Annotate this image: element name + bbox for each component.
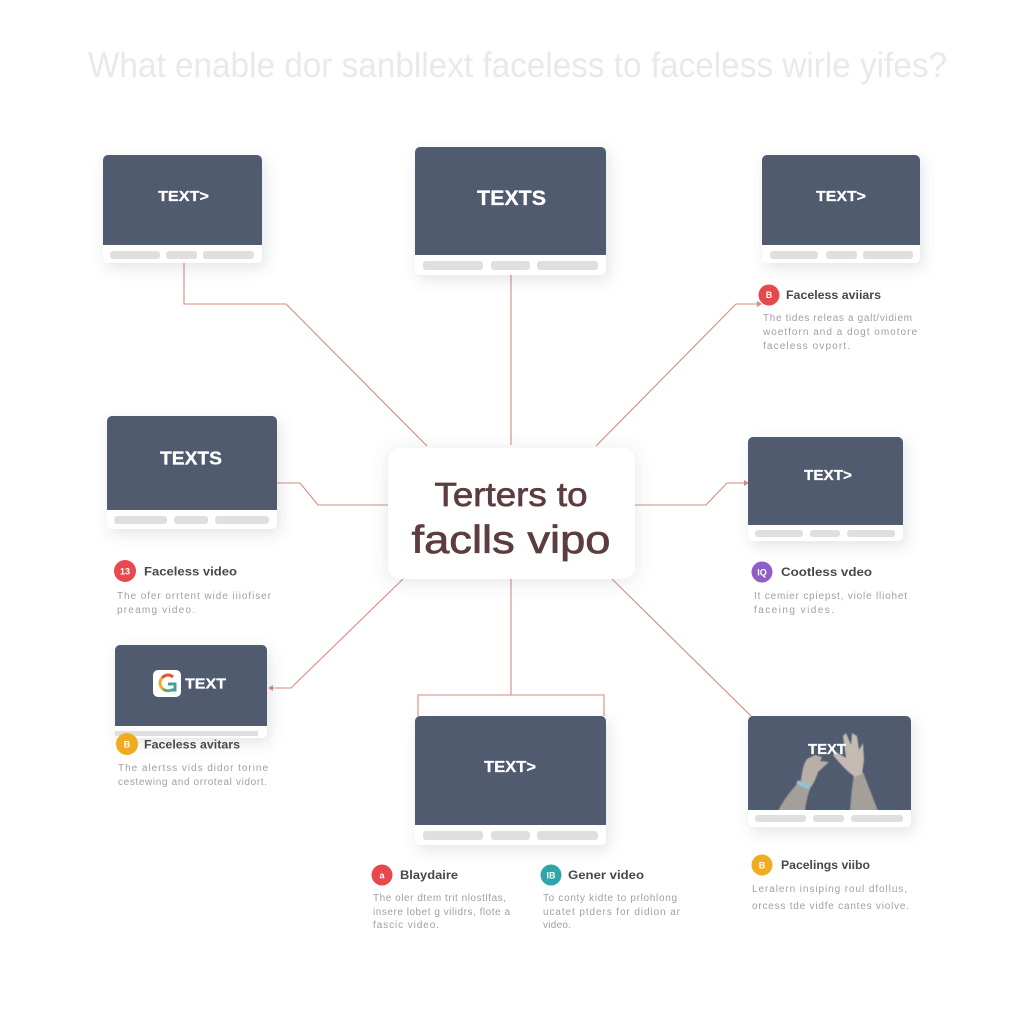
callout: pacelings viibo: Leralern insiping roul dfollus, bbox=[752, 884, 907, 895]
panel: bottom right video card with hands: TEXT bbox=[808, 742, 846, 758]
callout: faceless avitars bbox=[116, 733, 268, 788]
callout: faceless video: preamg video. bbox=[117, 605, 195, 616]
callout: gener video bbox=[540, 864, 681, 931]
callout: cootless vdeo: faceing vides. bbox=[754, 605, 834, 616]
callout: faceless aviiars: Faceless aviiars bbox=[786, 290, 881, 302]
title: What enable dor sanbllext faceless to faceless wirle yifes? bbox=[88, 46, 947, 85]
callout: pacelings viibo bbox=[752, 854, 909, 912]
panel: top right video card: TEXT> bbox=[816, 188, 866, 205]
connector lines bbox=[184, 263, 762, 717]
callout: faceless avitars: Faceless avitars bbox=[144, 740, 240, 752]
callout: pacelings viibo: orcess tde vidfe cantes violve. bbox=[752, 901, 909, 912]
panel: middle right video card: TEXT> bbox=[804, 467, 852, 484]
panel: lower left video card with logo bbox=[115, 645, 267, 738]
callout: blaydaire: a bbox=[379, 870, 385, 880]
callout: gener video: ucatet ptders for didion ar bbox=[543, 907, 681, 918]
callout: faceless aviiars bbox=[758, 284, 917, 352]
callout: cootless vdeo: It cemier cpiepst, viole lliohet bbox=[754, 591, 907, 602]
panel: top left video card bbox=[103, 155, 262, 263]
panel: bottom center video card bbox=[415, 716, 606, 845]
callout: gener video: video. bbox=[543, 920, 571, 931]
callout: faceless aviiars: woetforn and a dogt omotore bbox=[762, 327, 917, 338]
callout: faceless video bbox=[114, 560, 272, 616]
callout: faceless video: Faceless video bbox=[144, 566, 237, 578]
callout: cootless vdeo: Cootless vdeo bbox=[781, 567, 872, 579]
panel: bottom center video card: TEXT> bbox=[484, 759, 536, 776]
callout: faceless aviiars: The tides releas a galt/vidiem bbox=[763, 313, 912, 324]
callout: faceless aviiars: B bbox=[766, 290, 773, 300]
callout: pacelings viibo: Pacelings viibo bbox=[781, 860, 870, 872]
icon: colourful G logo bbox=[153, 670, 181, 697]
callout: blaydaire: The oler dtem trit nlostlfas, bbox=[373, 893, 506, 904]
panel: center hub: faclls vipo bbox=[412, 519, 610, 562]
panel: bottom right video card with hands bbox=[748, 716, 911, 827]
callout: blaydaire bbox=[372, 864, 510, 931]
icon: raised hands bbox=[778, 733, 878, 811]
callout: cootless vdeo bbox=[752, 562, 907, 616]
panel: top center video card: TEXTS bbox=[477, 187, 546, 210]
panel: middle left video card bbox=[107, 416, 277, 529]
callout: faceless avitars: B bbox=[124, 740, 131, 750]
callout: cootless vdeo: IQ bbox=[757, 568, 767, 578]
panel: middle right video card bbox=[748, 437, 903, 541]
callout: pacelings viibo: B bbox=[759, 860, 766, 870]
panel: lower left video card with logo: TEXT bbox=[185, 676, 226, 692]
callout: gener video: Gener video bbox=[568, 870, 644, 882]
callout: faceless video: 13 bbox=[120, 566, 130, 576]
panel: top center video card bbox=[415, 147, 606, 275]
panel: top left video card: TEXT> bbox=[158, 188, 209, 205]
callout: blaydaire: Blaydaire bbox=[400, 870, 458, 882]
callout: faceless aviiars: faceless ovport. bbox=[763, 341, 850, 352]
callout: faceless video: The ofer orrtent wide iiiofiser bbox=[117, 591, 272, 602]
callout: faceless avitars: cestewing and orroteal vidort. bbox=[118, 777, 267, 788]
callout: gener video: IB bbox=[546, 870, 556, 880]
callout: faceless avitars: The alertss vids didor torine bbox=[118, 763, 268, 774]
callout: gener video: To conty kidte to prlohlong bbox=[543, 893, 677, 904]
panel: top right video card bbox=[762, 155, 920, 263]
callout: blaydaire: fascic video. bbox=[373, 920, 439, 931]
panel: middle left video card: TEXTS bbox=[160, 448, 222, 468]
callout: blaydaire: insere lobet g vilidrs, flote a bbox=[373, 907, 510, 918]
panel: center hub: Terters to bbox=[434, 476, 588, 513]
panel: center hub bbox=[388, 448, 635, 579]
